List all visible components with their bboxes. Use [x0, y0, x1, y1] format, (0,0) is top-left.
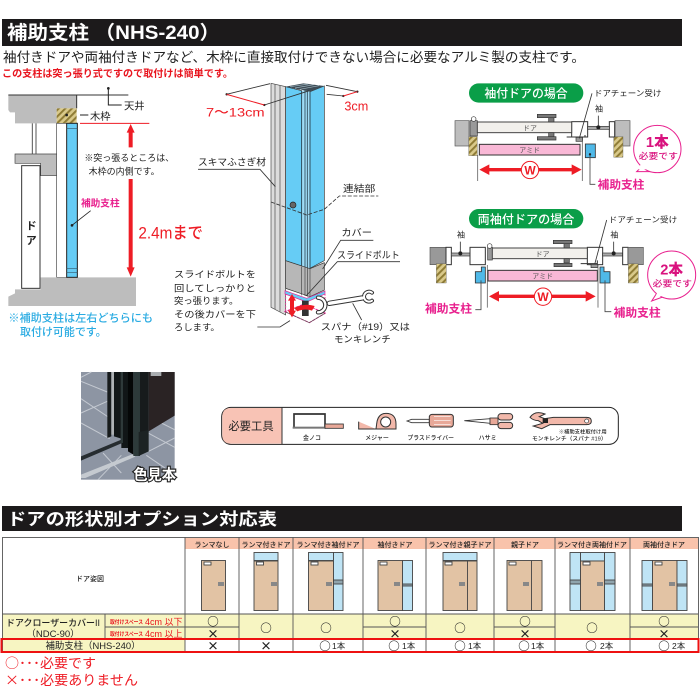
label: ceiling: [107, 87, 145, 112]
door: ド: [26, 220, 37, 232]
label: wood frame: 木枠: [90, 110, 111, 123]
heading: required tools: [222, 407, 282, 444]
header row: ランマ付き両袖付ドア: [557, 540, 627, 549]
row: auxiliary post: [2, 639, 185, 652]
callout: one needed: 必要です: [639, 151, 678, 161]
row: door closer cover: ドアクローザーカバーII: [6, 618, 100, 628]
screen: アミド: [532, 273, 553, 281]
label: support post: 補助支柱: [81, 197, 120, 209]
label: slide bolt: [306, 251, 400, 296]
width arrow W: W: [524, 163, 536, 177]
highlight: auxiliary post row: [2, 639, 698, 652]
label: spanner: スパナ（#19）又は: [321, 322, 410, 332]
table: options by door type: [2, 537, 698, 654]
note: mount either side: [8, 311, 153, 338]
tool: screwdriver: プラスドライバー: [407, 435, 454, 442]
instructions: 回してしっかりと: [174, 283, 256, 293]
note: mount either side: ※補助支柱は左右どちらにも: [8, 311, 153, 325]
screen: [488, 270, 597, 281]
label: height: 2.4mまで: [138, 224, 203, 243]
tool: adjustable wrench: [530, 413, 607, 443]
label: sidelight right: [610, 230, 618, 255]
label: gap filler: スキマふさぎ材: [198, 157, 266, 169]
option marks: ○: [260, 620, 272, 636]
instructions: [174, 269, 290, 333]
tool: saw: [293, 414, 343, 442]
heading: option table: [2, 506, 682, 531]
door leaf: [477, 114, 585, 141]
heading: required tools: 必要工具: [228, 420, 274, 433]
tool: tape measure: メジャー: [365, 435, 389, 442]
screen: [479, 144, 580, 155]
option marks: ○: [519, 614, 531, 630]
tool: adjustable wrench: モンキレンチ（スパナ #19）: [532, 436, 607, 443]
label: support post: [71, 197, 120, 227]
dimension: 7-13cm: 7〜13cm: [206, 106, 265, 120]
walls and frame: [455, 117, 630, 157]
header row: ランマ付き親子ドア: [428, 540, 492, 549]
width arrow W: W: [537, 290, 549, 304]
callout: two needed: [648, 251, 696, 301]
width arrow W: [478, 141, 582, 181]
gap filler strip: [271, 83, 286, 315]
note: bracing point: ※突っ張るところは、: [84, 153, 174, 163]
label: cover: カバー: [341, 228, 372, 239]
text block: introduction: 袖付きドアや両袖付きドアなど、木枠に直接取付けできない場合に必要なアルミ製の支柱です。: [3, 50, 585, 65]
row: door closer cover: 取付けスペース: [110, 618, 143, 626]
legend: needed: ○･･･必要です: [5, 652, 96, 672]
label: connecting part: 連結部: [343, 183, 376, 195]
label: cover: [323, 228, 373, 269]
label: door chain receiver: [595, 214, 677, 264]
label: support post left: 補助支柱: [425, 302, 473, 316]
option marks: ×: [207, 626, 219, 642]
option marks: ×: [260, 638, 272, 654]
label: support post right: [605, 280, 661, 319]
label: slide bolt: スライドボルト: [337, 251, 400, 262]
instructions: スライドボルトを: [174, 269, 256, 279]
post counts: 2本: [600, 641, 614, 651]
photo: colour sample: [81, 372, 176, 483]
header row: 袖付きドア: [378, 540, 412, 549]
foot and slide bolt: [285, 291, 325, 323]
panel: side section diagram: [8, 87, 203, 338]
label: spanner: モンキレンチ: [334, 335, 391, 345]
option marks: ○: [518, 638, 530, 654]
support post section: [585, 144, 595, 158]
dimension: 3cm: [326, 85, 368, 113]
callout: one needed: 1本: [646, 133, 669, 151]
door figure: sidelight: [378, 560, 412, 610]
walls and frame: [430, 244, 643, 283]
note: mount either side: 取付け可能です。: [20, 324, 107, 338]
row: door closer cover: [2, 614, 698, 640]
text block: introduction: この支柱は突っ張り式ですので取付けは簡単です。: [2, 67, 233, 80]
label: sidelight: 袖: [595, 103, 603, 113]
tool: saw: 金ノコ: [303, 434, 321, 442]
row: door closer cover: 4cm 以下: [145, 617, 183, 627]
option marks: ×: [207, 638, 219, 654]
tool: scissors: ハサミ: [479, 435, 497, 442]
row: door closer cover: 4cm 以上: [145, 629, 183, 639]
heading pill: 両袖付ドアの場合: [478, 211, 574, 226]
header row: ランマなし: [194, 541, 230, 549]
heading pill: [469, 83, 583, 103]
tool: scissors: [464, 414, 513, 442]
label: gap filler: [198, 157, 275, 187]
label: ceiling: 天井: [124, 99, 145, 112]
door: [22, 166, 40, 288]
label: support post left: [425, 280, 481, 316]
option marks: ○: [388, 638, 400, 654]
row: door closer cover: 取付けスペース: [110, 630, 143, 638]
door figure: two sidelights: [642, 560, 687, 610]
tool: screwdriver: [407, 414, 454, 442]
post counts: 1本: [468, 641, 482, 651]
row: auxiliary post: 補助支柱（NHS-240）: [46, 640, 140, 652]
label: sidelight left: [457, 230, 465, 255]
dimension: 3cm: 3cm: [344, 99, 368, 113]
legend: not needed: ×･･･必要ありません: [5, 669, 138, 689]
label: wood frame: [65, 110, 111, 123]
label: support post right: 補助支柱: [614, 305, 661, 319]
post counts: 1本: [531, 641, 545, 651]
label: sidelight right: 袖: [610, 230, 618, 240]
post counts: 1本: [402, 641, 416, 651]
note: inside of frame: 木枠の内側です。: [89, 165, 160, 176]
option marks: ○: [658, 638, 670, 654]
tool: tape measure: [359, 413, 396, 442]
arrow: height up to 2.4m: [80, 123, 149, 277]
cover: [286, 261, 324, 297]
header row: ランマ付きドア: [242, 540, 290, 549]
header row: [185, 538, 698, 549]
label: door figure: ドア姿図: [76, 574, 104, 583]
connecting bolt: [290, 202, 296, 208]
door figure: double door: [507, 560, 542, 610]
option marks: [207, 614, 670, 654]
header row: 親子ドア: [511, 540, 539, 549]
label: support post: [589, 153, 645, 191]
table grid: [2, 537, 698, 652]
option marks: ○: [454, 620, 466, 636]
post counts: [332, 641, 686, 651]
row: door closer cover: （NDC-90）: [26, 628, 80, 640]
dimension: 7-13cm: [206, 84, 309, 120]
door leaf: ドア: [523, 124, 537, 132]
option marks: ×: [519, 626, 531, 642]
label: door chain receiver: ドアチェーン受け: [594, 88, 661, 98]
tool: adjustable wrench: ※補助支柱取付け用: [559, 427, 607, 435]
callout: one needed: [634, 125, 681, 173]
instructions: ろします。: [174, 323, 220, 333]
callout: two needed: 必要です: [653, 278, 692, 288]
door: ア: [26, 235, 37, 247]
instructions: その後カバーを下: [174, 308, 256, 319]
support post: [67, 123, 77, 277]
label: door chain receiver: [579, 88, 661, 138]
header row: ランマ付き袖付ドア: [296, 540, 360, 549]
option marks: ○: [658, 614, 670, 630]
label: sidelight left: 袖: [457, 230, 465, 240]
label: spanner: [321, 303, 410, 345]
door figure: transom two sidelights: [570, 552, 615, 610]
panel: door with two sidelights: [425, 209, 696, 319]
support post right: [600, 267, 610, 283]
heading: option table: ドアの形状別オプション対応表: [7, 510, 277, 529]
option marks: ×: [658, 626, 670, 642]
width arrow W: [487, 265, 598, 308]
door figure: no transom: [202, 560, 226, 610]
option marks: ×: [389, 626, 401, 642]
option marks: ○: [585, 638, 597, 654]
label: sidelight: [595, 103, 603, 129]
option marks: ○: [586, 620, 598, 636]
door figure: transom and sidelight: [308, 552, 343, 610]
heading: 補助支柱 title bar: 補助支柱 （NHS-240）: [7, 22, 220, 44]
door leaf: ドア: [536, 250, 550, 258]
label: support post: 補助支柱: [598, 177, 645, 191]
option marks: ○: [207, 614, 219, 630]
panel: door with one sidelight: [455, 83, 681, 191]
panel: post perspective diagram: [174, 83, 410, 345]
option marks: ○: [389, 614, 401, 630]
option marks: ○: [319, 638, 331, 654]
caption: colour sample: 色見本: [133, 465, 176, 483]
text block: introduction: [2, 50, 585, 80]
label: connecting part: [271, 183, 378, 215]
support post left: [475, 267, 485, 283]
option marks: ○: [454, 638, 466, 654]
callout: two needed: 2本: [660, 260, 683, 278]
heading: 補助支柱 title bar: [2, 19, 682, 46]
option marks: ○: [320, 620, 332, 636]
heading pill: [469, 209, 583, 228]
heading pill: 袖付ドアの場合: [484, 86, 568, 101]
screen: アミド: [519, 147, 540, 155]
header row: 両袖付きドア: [643, 540, 685, 549]
door leaf: [492, 240, 598, 268]
label: door chain receiver: ドアチェーン受け: [609, 214, 677, 224]
post counts: 1本: [332, 641, 346, 651]
post counts: 2本: [672, 641, 686, 651]
spanner: [318, 292, 372, 312]
door figure: transom: [254, 552, 278, 610]
instructions: 突っ張ります。: [174, 296, 238, 306]
door figure: transom double door: [443, 552, 477, 610]
post body: [286, 83, 324, 269]
panel: required tools: [222, 407, 618, 444]
